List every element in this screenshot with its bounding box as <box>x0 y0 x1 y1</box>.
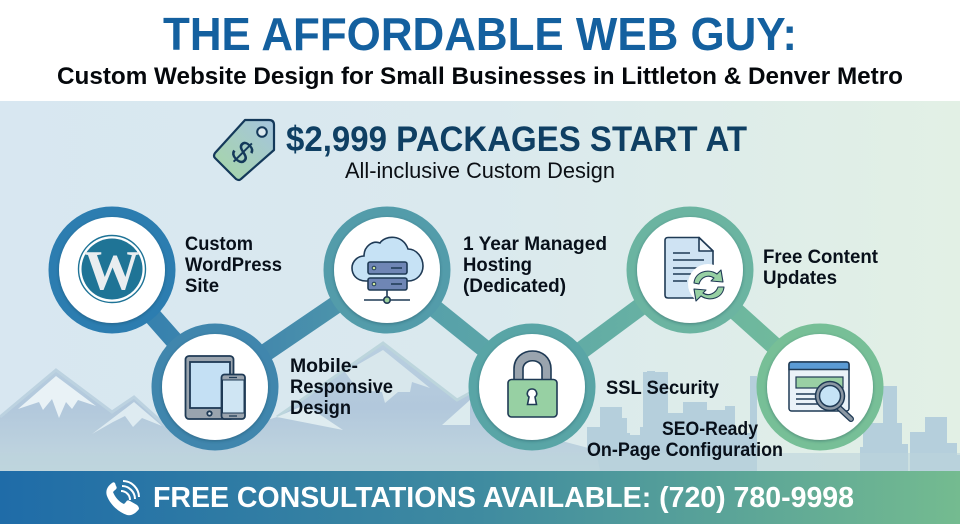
label: ssl security: SSL Security <box>606 377 719 399</box>
connector path <box>112 270 820 387</box>
label: custom wordpress site: Custom <box>185 233 253 255</box>
label: seo-ready: SEO-Ready <box>662 418 758 440</box>
subtitle: Custom Website Design for Small Businesses in Littleton & Denver Metro <box>57 63 903 90</box>
step: mobile responsive <box>152 324 278 450</box>
price tag icon: $ <box>224 133 262 171</box>
price subheading: All-inclusive Custom Design <box>345 158 615 183</box>
lower haze <box>0 453 960 472</box>
label: mobile responsive: Responsive <box>290 376 393 398</box>
label: free content updates: Free Content <box>763 246 878 268</box>
label: seo-ready <box>587 418 783 461</box>
icon: padlock <box>508 351 557 417</box>
icon: tablet and phone <box>186 356 245 419</box>
label: mobile responsive <box>290 355 393 419</box>
step: seo-ready <box>756 324 884 450</box>
skyline backdrop <box>587 371 960 471</box>
title: THE AFFORDABLE WEB GUY: <box>163 8 797 60</box>
step: free content updates <box>626 206 754 334</box>
step: managed hosting <box>324 206 450 334</box>
price tag icon <box>214 120 274 180</box>
header background <box>0 0 960 101</box>
contact bar <box>0 471 960 524</box>
icon: cloud server <box>352 237 423 303</box>
icon: browser with magnifier <box>789 362 851 419</box>
label: custom wordpress site: WordPress <box>185 254 282 276</box>
label: managed hosting <box>463 233 607 297</box>
contact text: FREE CONSULTATIONS AVAILABLE: (720) 780-9998 <box>153 482 854 514</box>
icon: phone <box>106 481 139 515</box>
label: free content updates <box>763 246 878 289</box>
label: managed hosting: (Dedicated) <box>463 275 566 297</box>
mountains backdrop <box>0 343 600 471</box>
label: custom wordpress site: Site <box>185 275 219 297</box>
icon: wordpress logo: W <box>84 240 140 302</box>
icon: document refresh <box>665 238 728 304</box>
label: mobile responsive: Design <box>290 397 351 419</box>
label: seo-ready: On-Page Configuration <box>587 439 783 461</box>
label: managed hosting: Hosting <box>463 254 532 276</box>
step: ssl security <box>468 324 596 450</box>
panel background <box>0 101 960 472</box>
label: managed hosting: 1 Year Managed <box>463 233 607 255</box>
label: free content updates: Updates <box>763 267 837 289</box>
label: custom wordpress site <box>185 233 282 297</box>
step: custom wordpress site <box>48 206 176 334</box>
price heading: $2,999 PACKAGES START AT <box>286 120 747 159</box>
label: mobile responsive: Mobile- <box>290 355 358 377</box>
